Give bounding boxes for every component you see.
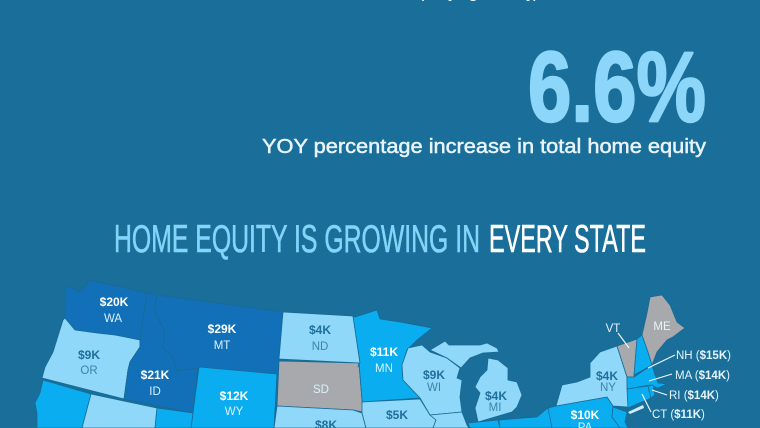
label: ND: ND bbox=[312, 341, 328, 353]
label: ND: $4K bbox=[309, 323, 331, 337]
state: Nebraska bbox=[274, 406, 366, 428]
state: Utah bbox=[155, 408, 193, 428]
state: Pennsylvania bbox=[548, 397, 622, 428]
label: OR: OR bbox=[80, 365, 98, 377]
state: Oregon bbox=[42, 318, 140, 399]
label: MN bbox=[370, 345, 398, 375]
label: MI bbox=[485, 389, 507, 414]
state: Maine bbox=[642, 295, 685, 365]
label: WA: WA bbox=[104, 313, 122, 325]
label: OR: $9K bbox=[78, 348, 100, 362]
state: California bbox=[35, 380, 91, 428]
label: CT: CT ($11K) bbox=[652, 409, 705, 421]
label: IA: $5K bbox=[386, 408, 408, 422]
label: WA bbox=[100, 295, 129, 325]
label: RI: RI ($14K) bbox=[669, 390, 719, 402]
label: MT bbox=[208, 322, 237, 352]
statistic caption: YOY percentage increase in total home equity bbox=[262, 136, 706, 158]
state: Montana bbox=[154, 295, 283, 374]
label: PA bbox=[571, 408, 600, 428]
label: OR bbox=[78, 348, 100, 377]
label: VT: VT bbox=[606, 323, 620, 335]
label: NY: NY bbox=[600, 382, 616, 394]
state: Rhode Island bbox=[648, 385, 655, 398]
label: MN: MN bbox=[375, 363, 393, 375]
label: ID bbox=[141, 368, 170, 398]
label: WY: $12K bbox=[220, 389, 249, 403]
label: MI: MI bbox=[489, 402, 501, 414]
state: Iowa bbox=[362, 399, 436, 428]
state: North Dakota bbox=[279, 312, 360, 363]
label: NH: NH ($15K) bbox=[676, 350, 731, 362]
label: ND bbox=[309, 323, 331, 353]
label: ID: $21K bbox=[141, 368, 170, 382]
label: MT: MT bbox=[214, 340, 230, 352]
label: NY: $4K bbox=[596, 369, 618, 383]
label: WI: $9K bbox=[423, 368, 445, 382]
state: Wisconsin bbox=[402, 345, 462, 415]
label: WY bbox=[220, 389, 249, 418]
label: WI bbox=[423, 368, 445, 394]
label: MN: $11K bbox=[370, 345, 398, 359]
map of states bbox=[35, 280, 685, 428]
label: WY: WY bbox=[225, 406, 244, 418]
big statistic: 6.6% bbox=[528, 31, 706, 142]
state: New Jersey bbox=[612, 407, 628, 428]
label: MI: $4K bbox=[485, 389, 507, 403]
state: New Hampshire bbox=[634, 335, 652, 375]
state: Indiana bbox=[468, 420, 500, 428]
state: Washington bbox=[65, 280, 147, 340]
label: MT: $29K bbox=[208, 322, 237, 336]
state: Illinois bbox=[430, 412, 469, 428]
state: South Dakota bbox=[277, 361, 363, 412]
leader lines bbox=[618, 333, 675, 412]
state: Massachusetts bbox=[627, 365, 667, 389]
state: Connecticut bbox=[627, 386, 651, 408]
label: SD: SD bbox=[313, 384, 329, 396]
label: MA: MA ($14K) bbox=[675, 370, 730, 382]
label: ME: ME bbox=[653, 321, 671, 333]
Long Island bbox=[628, 405, 644, 414]
state: Michigan bbox=[430, 341, 522, 422]
state: Ohio bbox=[499, 407, 552, 428]
state: Wyoming bbox=[191, 367, 277, 428]
value labels on states bbox=[78, 295, 618, 428]
state: Minnesota bbox=[353, 310, 432, 412]
label: WA: $20K bbox=[100, 295, 129, 309]
state: Idaho bbox=[124, 293, 198, 413]
label: PA: $10K bbox=[571, 408, 600, 422]
heading: HOME EQUITY IS GROWING IN bbox=[114, 218, 480, 261]
label: ID: ID bbox=[149, 386, 161, 398]
state: Nevada bbox=[82, 394, 157, 428]
label: WI: WI bbox=[427, 382, 441, 394]
label: NY bbox=[596, 369, 618, 394]
heading: EVERY STATE bbox=[489, 218, 646, 261]
state: New York bbox=[556, 346, 628, 407]
state: Vermont bbox=[617, 339, 637, 377]
